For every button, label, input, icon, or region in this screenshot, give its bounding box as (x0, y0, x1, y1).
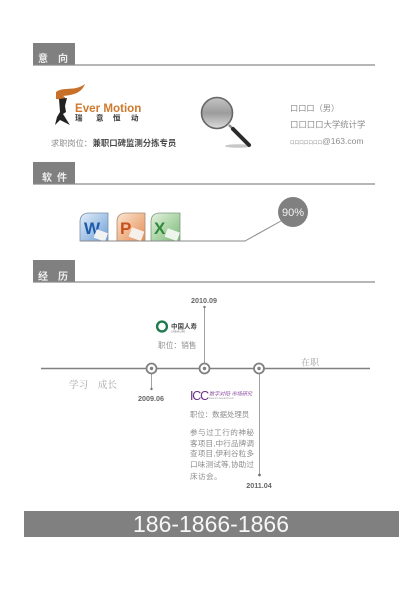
icon: PowerPoint (117, 213, 145, 241)
date: 2011.04: 2011.04 (246, 481, 272, 490)
section heading: 意向 (33, 43, 375, 65)
section heading: 经历 (33, 260, 375, 283)
label: 在职: 在职 (301, 356, 320, 368)
job target (51, 138, 176, 148)
skill level badge: 90% (278, 197, 308, 227)
label: 学习 成长: 学习 成长 (69, 379, 117, 391)
personal info: 口口口口大学统计学 (290, 120, 365, 130)
section heading: 软件: 软 (42, 171, 52, 184)
logo: Ever Motion (55, 84, 141, 125)
logo: China Life: CHINA LIFE (171, 330, 185, 334)
icon: magnifying glass (202, 98, 251, 148)
timeline (41, 306, 370, 476)
contact bar: 186-1866-1866 (133, 511, 289, 537)
logo: China Life: 中国人寿 (171, 322, 198, 330)
node: 2009.06 (146, 364, 156, 374)
section heading: 经历: 历 (58, 271, 68, 283)
job description: 查项目,伊利谷粒多 (190, 448, 254, 458)
personal info: 口口口（男） (290, 104, 339, 113)
job target: 求职岗位： (51, 138, 92, 148)
skill level line (80, 221, 281, 241)
logo: Ever Motion: 瑞 (75, 112, 83, 122)
job description (190, 427, 254, 481)
icon: Word (80, 213, 108, 242)
job description: 口味测试等,协助过 (190, 459, 254, 469)
job title: 销售: 职位：销售 (158, 340, 196, 350)
skill level badge: 90%: 90% (282, 207, 304, 219)
logo: ICC: www.icc-research.com (209, 397, 234, 400)
personal info: 口口口口口口口@163.com (290, 136, 363, 146)
section heading: 意向: 意 (38, 52, 48, 65)
job description: 客项目,中行品牌调 (190, 438, 254, 448)
icon: PowerPoint: P (120, 219, 131, 238)
logo: Ever Motion: 意 (96, 112, 104, 122)
logo: Ever Motion: Ever Motion (75, 102, 141, 115)
job title: 数据处理员: 职位：数据处理员 (190, 410, 249, 419)
date: 2010.09: 2010.09 (191, 296, 217, 305)
contact bar (24, 511, 399, 537)
job target: 兼职口碑监测分拣专员 (92, 138, 176, 148)
icon: Excel: X (154, 219, 166, 238)
logo: Ever Motion: 动 (131, 112, 139, 122)
section heading: 软件: 件 (57, 171, 67, 184)
logo: China Life (157, 322, 198, 334)
logo: ICC: 数字对阳·市场研究 (209, 390, 253, 398)
personal info (290, 104, 365, 146)
logo: ICC: ICC (190, 389, 209, 403)
node: 2011.04 (254, 364, 264, 374)
section heading: 经历: 经 (38, 270, 48, 283)
logo: Ever Motion: 恒 (113, 114, 121, 122)
section heading: 意向: 向 (58, 52, 68, 65)
section heading: 软件 (33, 162, 375, 184)
job description: 参与过工行的神秘 (190, 427, 254, 437)
job description: 床访会。 (190, 471, 222, 481)
icon: Word: W (84, 219, 101, 238)
node: 2010.09 (200, 364, 210, 374)
date: 2009.06: 2009.06 (138, 394, 164, 403)
icon: Excel (151, 213, 180, 241)
logo: ICC (190, 389, 253, 403)
